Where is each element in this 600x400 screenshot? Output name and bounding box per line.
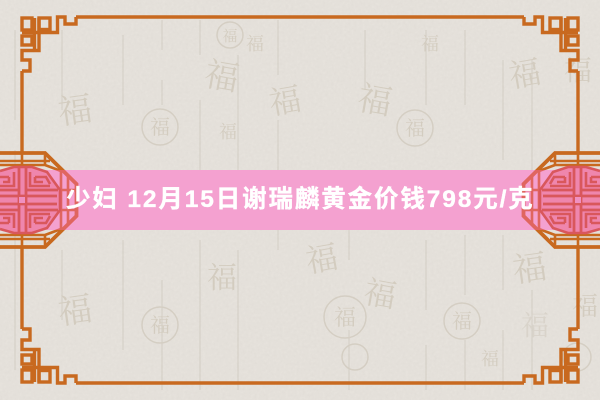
right octagon over band [522,170,546,230]
background watermark pattern: 福 [572,292,598,321]
background watermark pattern: 福 [421,34,439,54]
background watermark pattern: 福 [219,122,237,142]
background watermark pattern: 福 [266,80,304,121]
background watermark pattern: 福 [521,310,549,342]
background watermark pattern: 福 [207,262,237,295]
left medallion [0,167,60,233]
right medallion [540,167,600,233]
left octagon over band [54,170,78,230]
background watermark pattern: 福 [405,117,425,140]
background watermark pattern: 福 [303,239,341,280]
background watermark pattern: 福 [334,305,356,330]
title text: 少妇 12月15日谢瑞麟黄金价钱798元/克 [66,186,535,213]
pink title band [0,170,600,230]
background watermark pattern: 福 [222,28,238,45]
left octagon lattice [0,140,76,260]
background watermark pattern: 福 [150,314,170,337]
background watermark pattern: 福 [56,291,95,332]
background watermark pattern: 福 [56,91,95,132]
background watermark pattern: 福 [202,56,242,99]
background watermark pattern: 福 [150,116,170,139]
background watermark pattern: 福 [506,54,544,95]
background watermark pattern: 福 [355,80,395,123]
background watermark pattern: 福 [246,34,264,54]
background watermark pattern: 福 [361,274,399,315]
frame: top-left corner ornament [22,17,76,71]
background watermark pattern: 福 [481,349,499,369]
background watermark pattern: 福 [564,55,592,87]
frame: bottom-right corner ornament [524,329,578,383]
background watermark pattern: 福 [452,310,472,333]
right octagon lattice [524,140,600,260]
frame: top-right corner ornament [524,17,578,71]
background watermark pattern: 福 [511,249,549,290]
frame: bottom-left corner ornament [22,329,76,383]
